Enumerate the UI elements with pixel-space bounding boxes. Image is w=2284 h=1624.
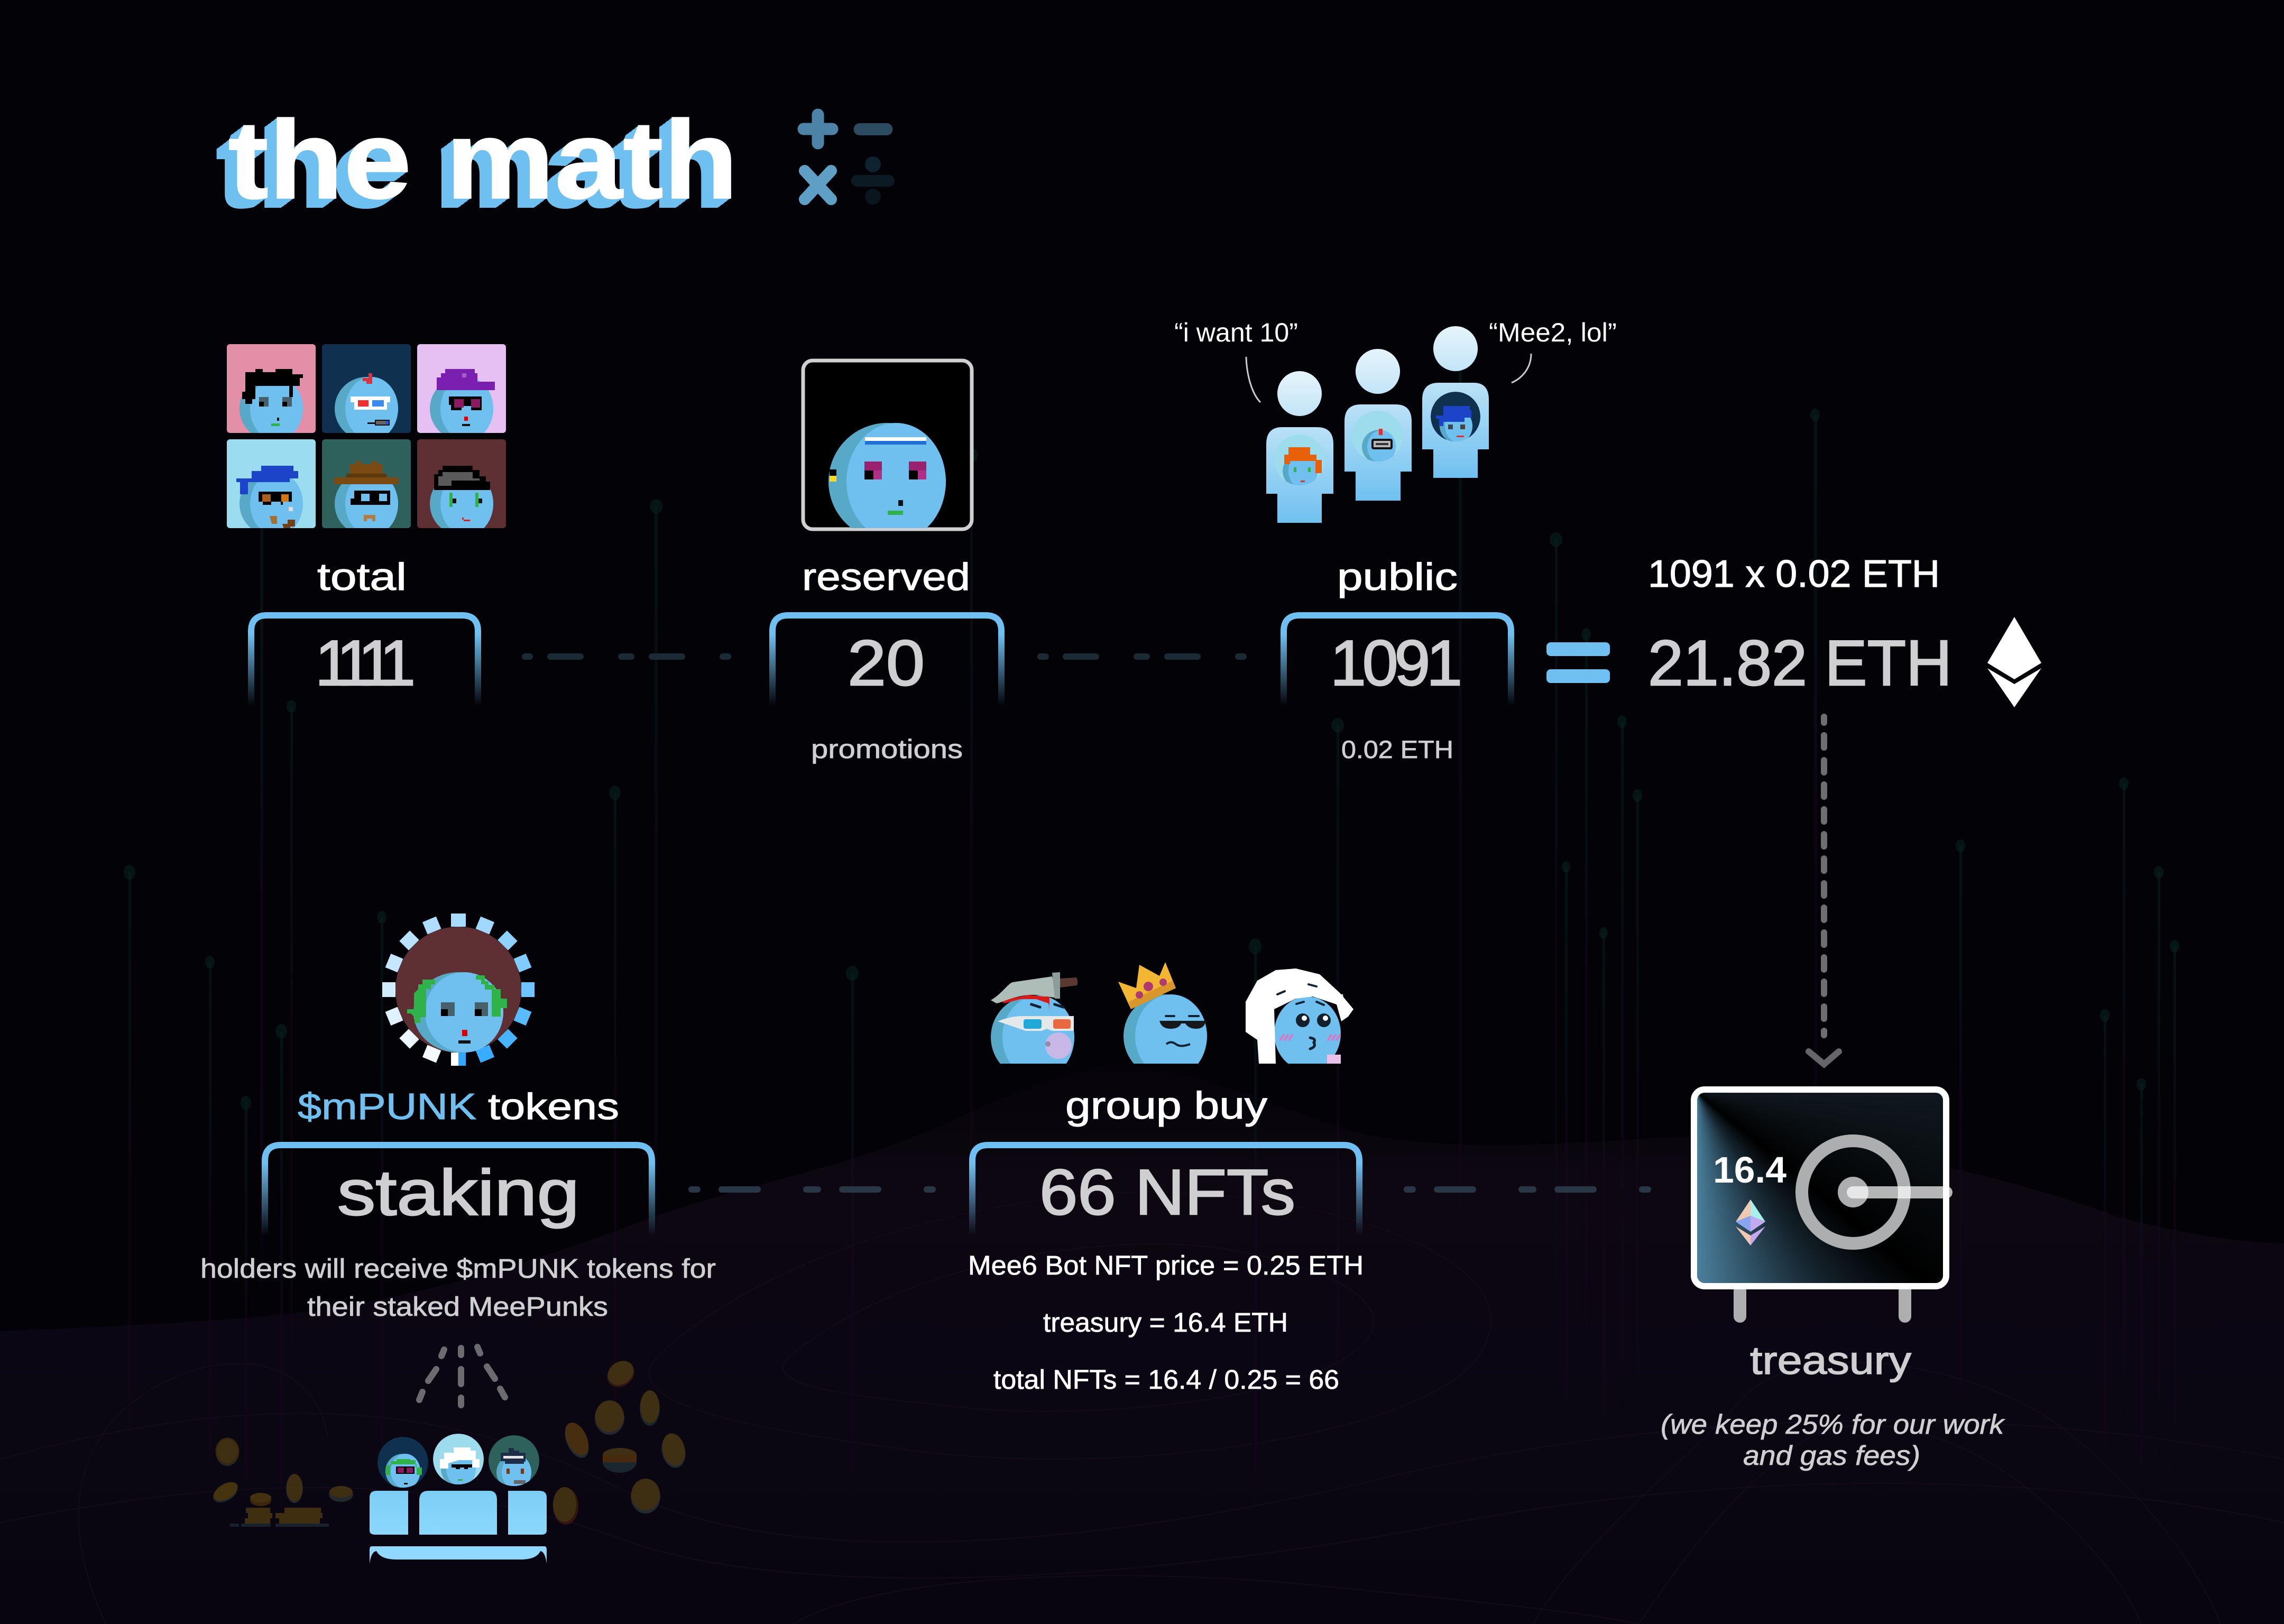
safe dial: [1802, 1141, 1953, 1243]
speech: i want 10: [1174, 318, 1298, 402]
box: staking: staking: [337, 1157, 579, 1229]
speech: i want 10: “i want 10”: [1174, 318, 1298, 347]
text: multiplication formula: 1091 x 0.02 ETH: [1648, 553, 1940, 595]
avatar: pink with black hair: [227, 344, 316, 440]
description: group buy calculation: treasury = 16.4 ETH: [1043, 1307, 1288, 1337]
label: public: public: [1337, 556, 1458, 598]
box: reserved value: 20: [848, 627, 925, 699]
label: group buy: group buy: [1065, 1085, 1267, 1127]
coins left of the sofa: [210, 1438, 353, 1527]
holder 3 avatar: [489, 1435, 539, 1490]
box: 66 NFTs: [972, 1145, 1359, 1235]
arrow: total raised down to treasury: [1809, 717, 1839, 1064]
text: total raised: 21.82 ETH: [1648, 627, 1952, 699]
avatar: teal with brown hat: [322, 439, 411, 536]
artwork layer: icons, charts and labels: [202, 109, 2041, 1564]
note: treasury fee: [1661, 1409, 2005, 1471]
speech: Mee2, lol: “Mee2, lol”: [1489, 318, 1617, 347]
box: reserved value: [772, 615, 1001, 706]
label: reserved: reserved: [802, 556, 970, 598]
description: staking: their staked MeePunks: [307, 1291, 608, 1322]
bot with white bunny hood: [1246, 968, 1353, 1071]
icon: staking avatar with dashed ring: [382, 914, 535, 1066]
icon: treasury safe: [1691, 1086, 1949, 1289]
safe ethereum logo: [1736, 1199, 1765, 1245]
label: total: total: [317, 556, 407, 598]
icon: ethereum logo: [1987, 617, 2041, 707]
bot with crown and shades: [1118, 962, 1208, 1078]
description: staking: [200, 1253, 716, 1322]
box: public value: 1091: [1330, 627, 1462, 699]
bot with knife and 3D glasses: [991, 972, 1077, 1079]
safe amount: 16.4: [1713, 1149, 1786, 1191]
connector: group buy to treasury: [1404, 1186, 1651, 1193]
connector: reserved to public: [1037, 653, 1247, 660]
icon: gold coins: [210, 1356, 688, 1527]
icon: three Mee6 bots: [991, 962, 1353, 1079]
label: mPUNK tokens: $mPUNK: [298, 1086, 476, 1127]
avatar: lilac with purple cap: [417, 344, 506, 440]
caption: promotions: promotions: [811, 734, 963, 764]
note: treasury fee: (we keep 25% for our work: [1661, 1409, 2005, 1440]
holder 1 avatar: [377, 1437, 428, 1489]
icon: safe legs: [1734, 1287, 1911, 1323]
box: total value: [251, 615, 478, 706]
box: 66 NFTs: 66 NFTs: [1039, 1156, 1295, 1228]
box: public value: [1284, 615, 1511, 706]
icon: equals sign: [1546, 642, 1610, 683]
holder 2 avatar: [433, 1434, 484, 1487]
label: mPUNK tokens: tokens: [488, 1086, 619, 1127]
sofa backs: [370, 1491, 547, 1535]
buyer 3: [1422, 326, 1489, 478]
connector: staking to group buy: [688, 1186, 936, 1193]
icon: three staked holders on sofa: [370, 1434, 547, 1564]
avatar: light blue with blue cap and pipe: [227, 439, 316, 536]
coins right of the sofa: [553, 1356, 688, 1525]
caption: price per NFT: 0.02 ETH: [1341, 735, 1453, 763]
buyer 1: [1266, 371, 1333, 523]
description: group buy calculation: total NFTs = 16.4 / 0.25 = 66: [993, 1364, 1339, 1395]
icon: math operators: [804, 115, 895, 205]
note: treasury fee: and gas fees): [1743, 1441, 1920, 1471]
icon: three public buyers: [1266, 326, 1489, 523]
arrows: fan from holders up to tokens: [419, 1347, 505, 1405]
speech: Mee2, lol: [1489, 318, 1617, 383]
sofa base: [370, 1546, 547, 1564]
label: treasury: treasury: [1750, 1339, 1911, 1382]
icon: six MeePunk avatars grid: [227, 344, 506, 536]
box: staking: [265, 1145, 652, 1236]
description: group buy calculation: [968, 1250, 1364, 1395]
label: mPUNK tokens: [298, 1086, 619, 1127]
buyer 2: [1344, 349, 1412, 501]
description: staking: holders will receive $mPUNK tokens for: [200, 1253, 716, 1284]
box: total value: 1111: [315, 627, 416, 699]
title: the math: [228, 97, 738, 222]
connector: total to reserved: [522, 653, 731, 660]
avatar: maroon with grey cap: [417, 439, 506, 536]
icon: reserved MeePunk card: [803, 361, 972, 540]
description: group buy calculation: Mee6 Bot NFT price = 0.25 ETH: [968, 1250, 1364, 1280]
avatar: navy with 3D glasses: [322, 344, 411, 440]
